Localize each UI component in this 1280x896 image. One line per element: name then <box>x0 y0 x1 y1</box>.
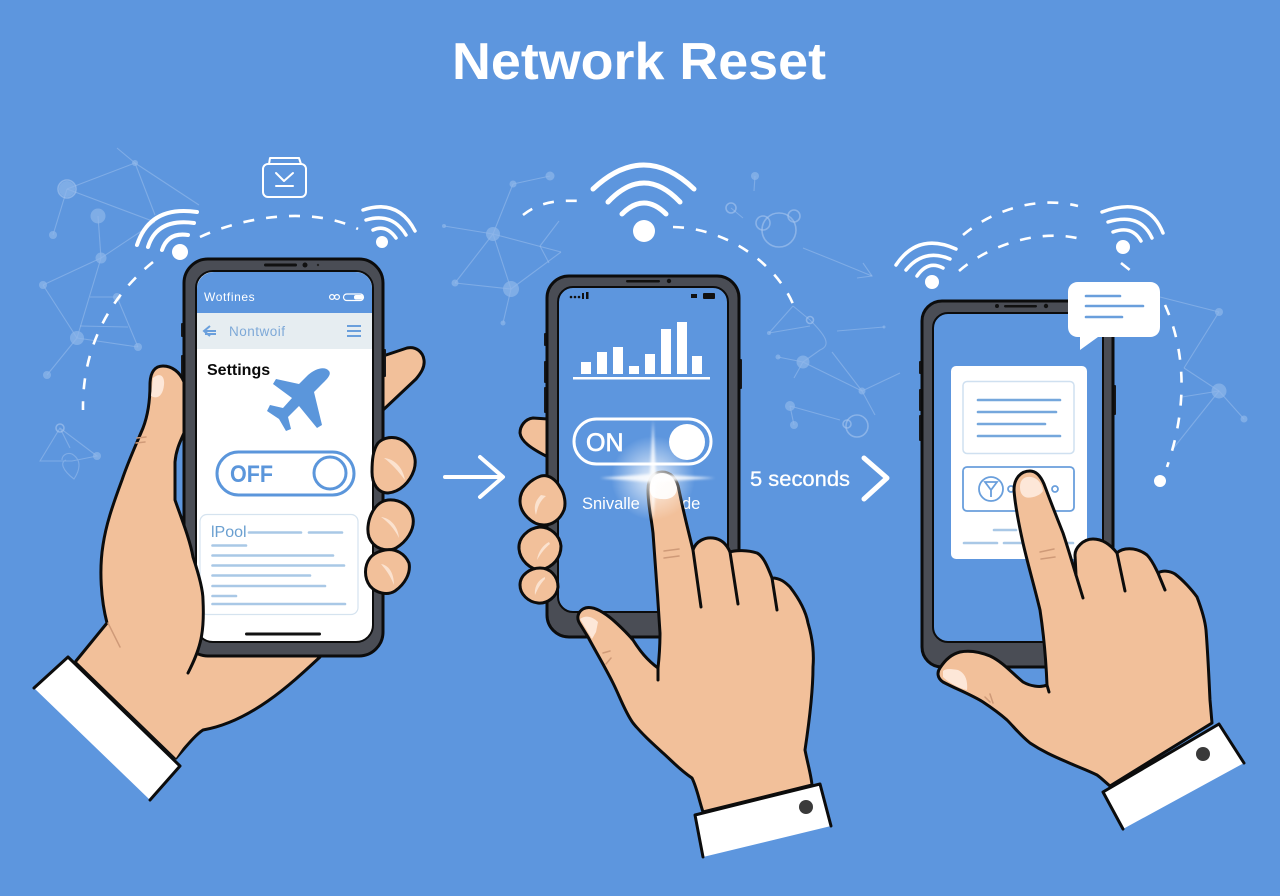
nav label: Nontwoif <box>229 324 286 339</box>
status bar icons <box>330 294 364 300</box>
toggle off <box>217 452 354 495</box>
settings heading: Settings <box>207 362 270 379</box>
network graph: centre left <box>442 172 561 326</box>
hamburger menu <box>347 326 361 336</box>
phone 2 <box>544 276 742 637</box>
toggle on <box>574 419 711 464</box>
shirt cuff <box>1103 724 1244 829</box>
thumb nail <box>580 617 598 639</box>
phone 2: de <box>682 495 700 513</box>
finger creases <box>1047 553 1165 692</box>
white shirt cuff <box>34 657 180 800</box>
finger 2 <box>372 438 415 493</box>
nav back arrow <box>204 326 216 336</box>
pointing hand <box>578 472 813 812</box>
icon: wifi 1a <box>137 211 197 260</box>
thumb and palm front fill <box>76 366 215 758</box>
confirm button <box>963 467 1074 511</box>
folds <box>985 549 1055 703</box>
network graph: centre right <box>726 172 900 437</box>
arrow: step 1 to step 2 <box>445 457 503 497</box>
cuff button <box>799 800 813 814</box>
icon: wifi 1b <box>363 207 415 248</box>
pointing hand <box>938 471 1212 786</box>
panel: step 2 hand toggling switch <box>519 276 831 857</box>
speech bubble <box>1068 282 1160 350</box>
dashed connection paths: panel 3 <box>959 203 1182 467</box>
finger behind phone <box>520 418 548 457</box>
title: Network Reset <box>452 33 826 91</box>
home bar <box>245 632 321 636</box>
toggle on: ON <box>586 429 624 457</box>
icon: circular glyph <box>979 477 1003 501</box>
thumb outline <box>76 366 203 673</box>
nails <box>943 477 1043 690</box>
status bar text: Wotfines <box>204 290 255 304</box>
dashed connection paths: panel 2 <box>523 201 793 304</box>
text card: lPool <box>211 524 247 541</box>
phone 1 <box>181 259 386 656</box>
finger 4 <box>366 550 409 593</box>
palm behind phone <box>76 640 330 758</box>
cuff button <box>1196 747 1210 761</box>
icon: wifi 2 <box>593 165 694 242</box>
finger glare <box>650 473 677 499</box>
bar chart <box>573 322 710 380</box>
finger creases <box>658 550 777 680</box>
dashed path end dot <box>1154 475 1166 487</box>
panel: step 3 hand tapping confirm <box>919 282 1244 829</box>
white dialog card <box>951 366 1087 559</box>
arrow: chevron to step 3 <box>864 458 887 499</box>
icon: download tray <box>263 158 306 197</box>
mode label: Snivalle <box>582 495 640 513</box>
icon: airplane <box>267 368 330 431</box>
finger 3 <box>368 500 413 550</box>
toggle off: OFF <box>230 461 273 488</box>
thumb nail <box>151 375 164 397</box>
thumb folds <box>108 437 146 647</box>
label: 5 seconds: 5 seconds <box>750 468 850 491</box>
finger nails <box>381 458 405 585</box>
tap glare <box>600 420 715 520</box>
icon: wifi 3b <box>1102 207 1163 254</box>
icon: wifi 3a <box>896 243 956 289</box>
shirt cuff <box>695 784 831 857</box>
finger behind phone <box>380 348 424 411</box>
text card <box>200 514 358 614</box>
network graph: left <box>39 148 199 479</box>
folds <box>603 549 679 664</box>
network graph: right <box>1160 297 1248 450</box>
status icons <box>570 292 715 299</box>
left fingertips <box>519 476 565 603</box>
dashed connection paths: panel 1 <box>83 216 358 410</box>
panel: step 1 hand holding phone <box>34 259 424 800</box>
phone 3 <box>919 301 1116 667</box>
